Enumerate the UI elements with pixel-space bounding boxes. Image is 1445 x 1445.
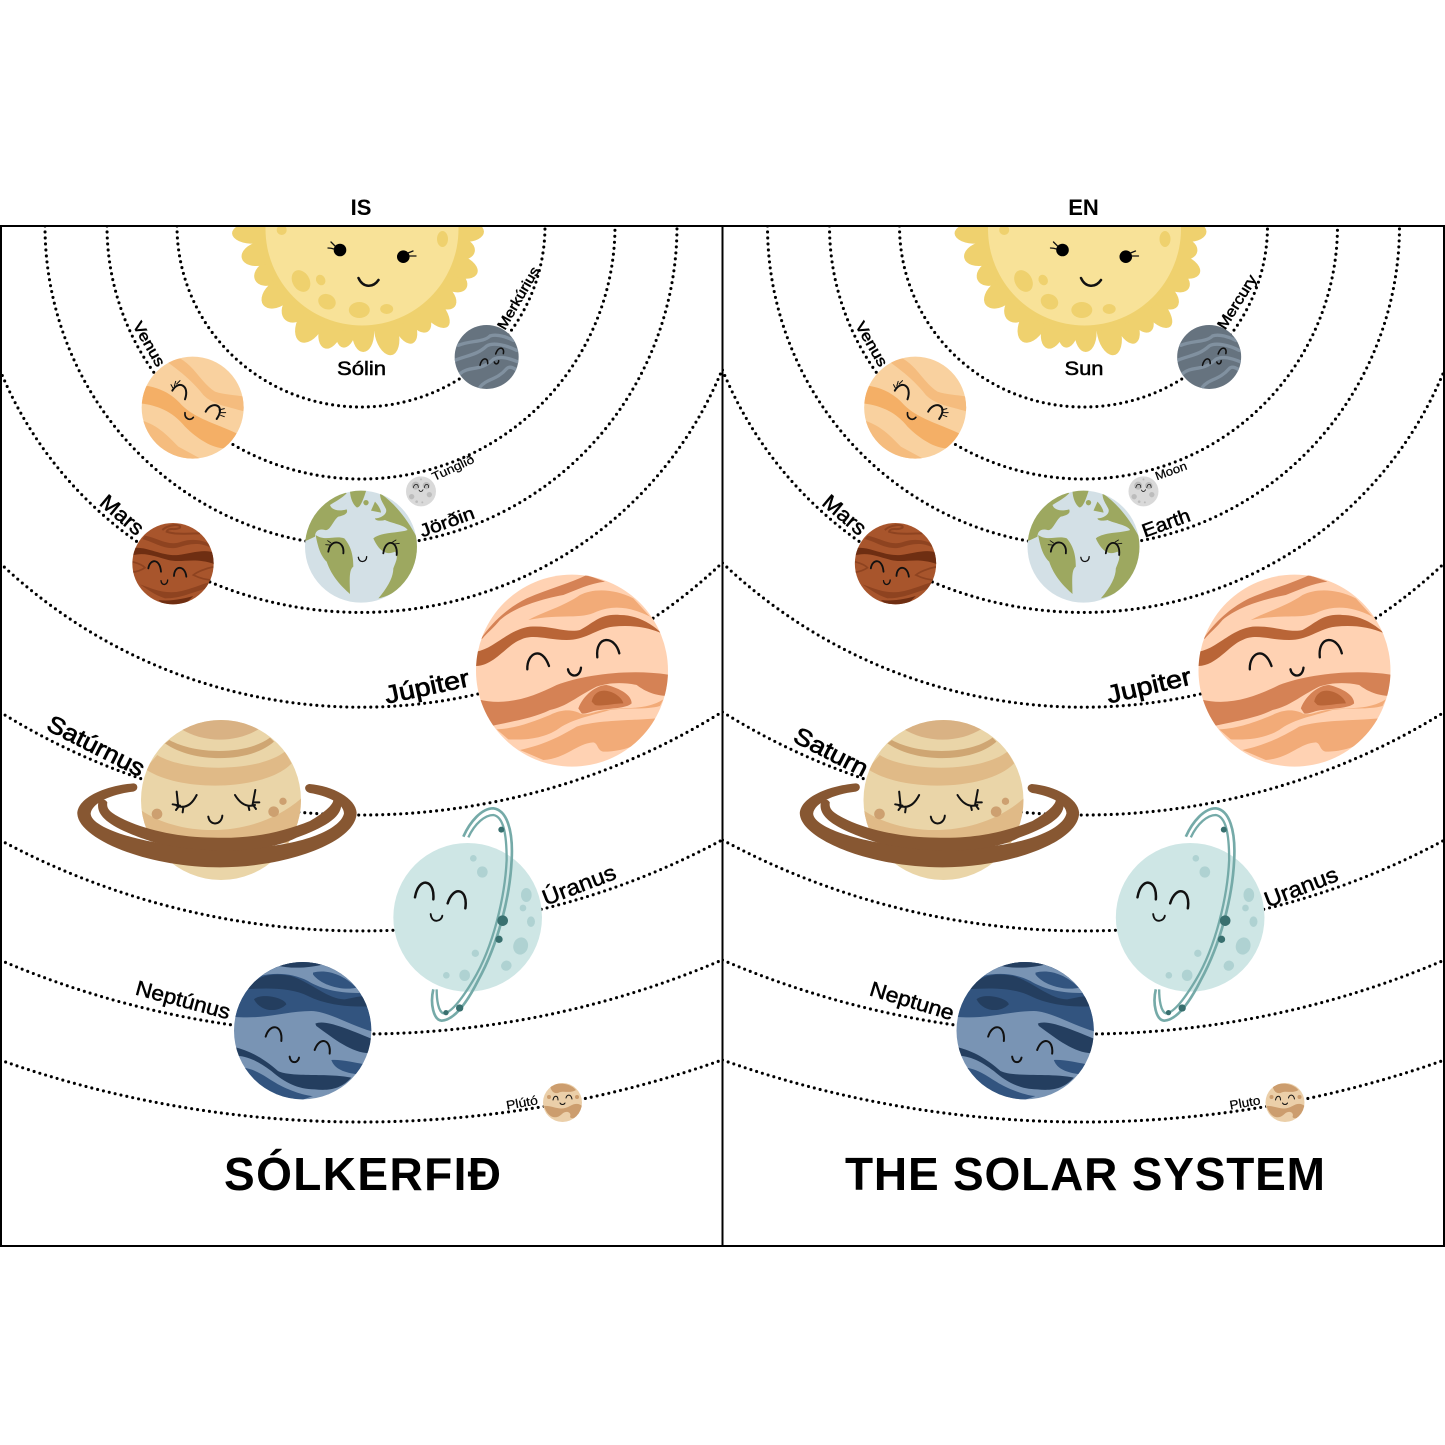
planet: neptune: [950, 956, 1097, 1103]
label: Neptúnus: Neptúnus: [133, 977, 233, 1024]
label: Jörðin: Jörðin: [417, 503, 477, 541]
label: Earth: Earth: [1139, 506, 1193, 542]
planet: sun: [954, 126, 1207, 358]
label: Jupiter: Jupiter: [1104, 663, 1194, 709]
label: Satúrnus: Satúrnus: [42, 710, 149, 783]
planet: jupiter: [475, 575, 670, 767]
planet: neptune: [228, 956, 375, 1103]
planet: earth: [303, 489, 420, 603]
planet: mars: [854, 523, 937, 604]
label: Merkúrius: Merkúrius: [494, 264, 542, 332]
label: Sun: Sun: [1064, 359, 1104, 380]
label: Uranus: Uranus: [1261, 862, 1341, 912]
panel: Icelandic solar system: [2, 227, 722, 1190]
label: Tunglið: Tunglið: [430, 452, 477, 484]
planet: uranus: [393, 808, 542, 1021]
planet: pluto: [1266, 1083, 1306, 1122]
label: Neptune: Neptune: [867, 978, 957, 1025]
label: Sólin: Sólin: [337, 359, 386, 380]
label: Mercury: Mercury: [1214, 271, 1261, 333]
planet: uranus: [1116, 808, 1264, 1021]
heading: IS: IS: [351, 195, 371, 220]
orbit lines: [722, 226, 1444, 1122]
title: THE SOLAR SYSTEM: THE SOLAR SYSTEM: [845, 1148, 1325, 1200]
orbit lines: [0, 226, 722, 1122]
planet: mars: [132, 523, 215, 604]
panel: English solar system: [724, 227, 1443, 1190]
label: Moon: Moon: [1153, 459, 1189, 483]
planet: pluto: [543, 1083, 583, 1122]
planet: earth: [1026, 489, 1142, 603]
planet: venus: [140, 357, 245, 460]
label: Pluto: Pluto: [1229, 1093, 1262, 1113]
label: Venus: Venus: [129, 319, 168, 370]
planet: saturn: [77, 715, 357, 880]
planet: jupiter: [1197, 575, 1392, 767]
label: Mars: Mars: [95, 491, 148, 540]
label: Úranus: Úranus: [539, 860, 619, 910]
planet: saturn: [800, 715, 1079, 880]
label: Saturn: Saturn: [789, 722, 873, 783]
planet: venus: [862, 357, 967, 460]
heading: EN: EN: [1068, 195, 1099, 220]
planet: sun: [232, 126, 484, 358]
label: Mars: Mars: [818, 491, 871, 540]
planet: moon: [1128, 476, 1158, 506]
label: Plútó: Plútó: [505, 1093, 539, 1113]
label: Júpiter: Júpiter: [382, 664, 472, 710]
label: Venus: Venus: [851, 319, 891, 370]
planet: mercury: [1177, 325, 1241, 389]
planet: moon: [406, 476, 436, 506]
planet: mercury: [455, 325, 519, 389]
title: SÓLKERFIÐ: SÓLKERFIÐ: [224, 1148, 501, 1200]
